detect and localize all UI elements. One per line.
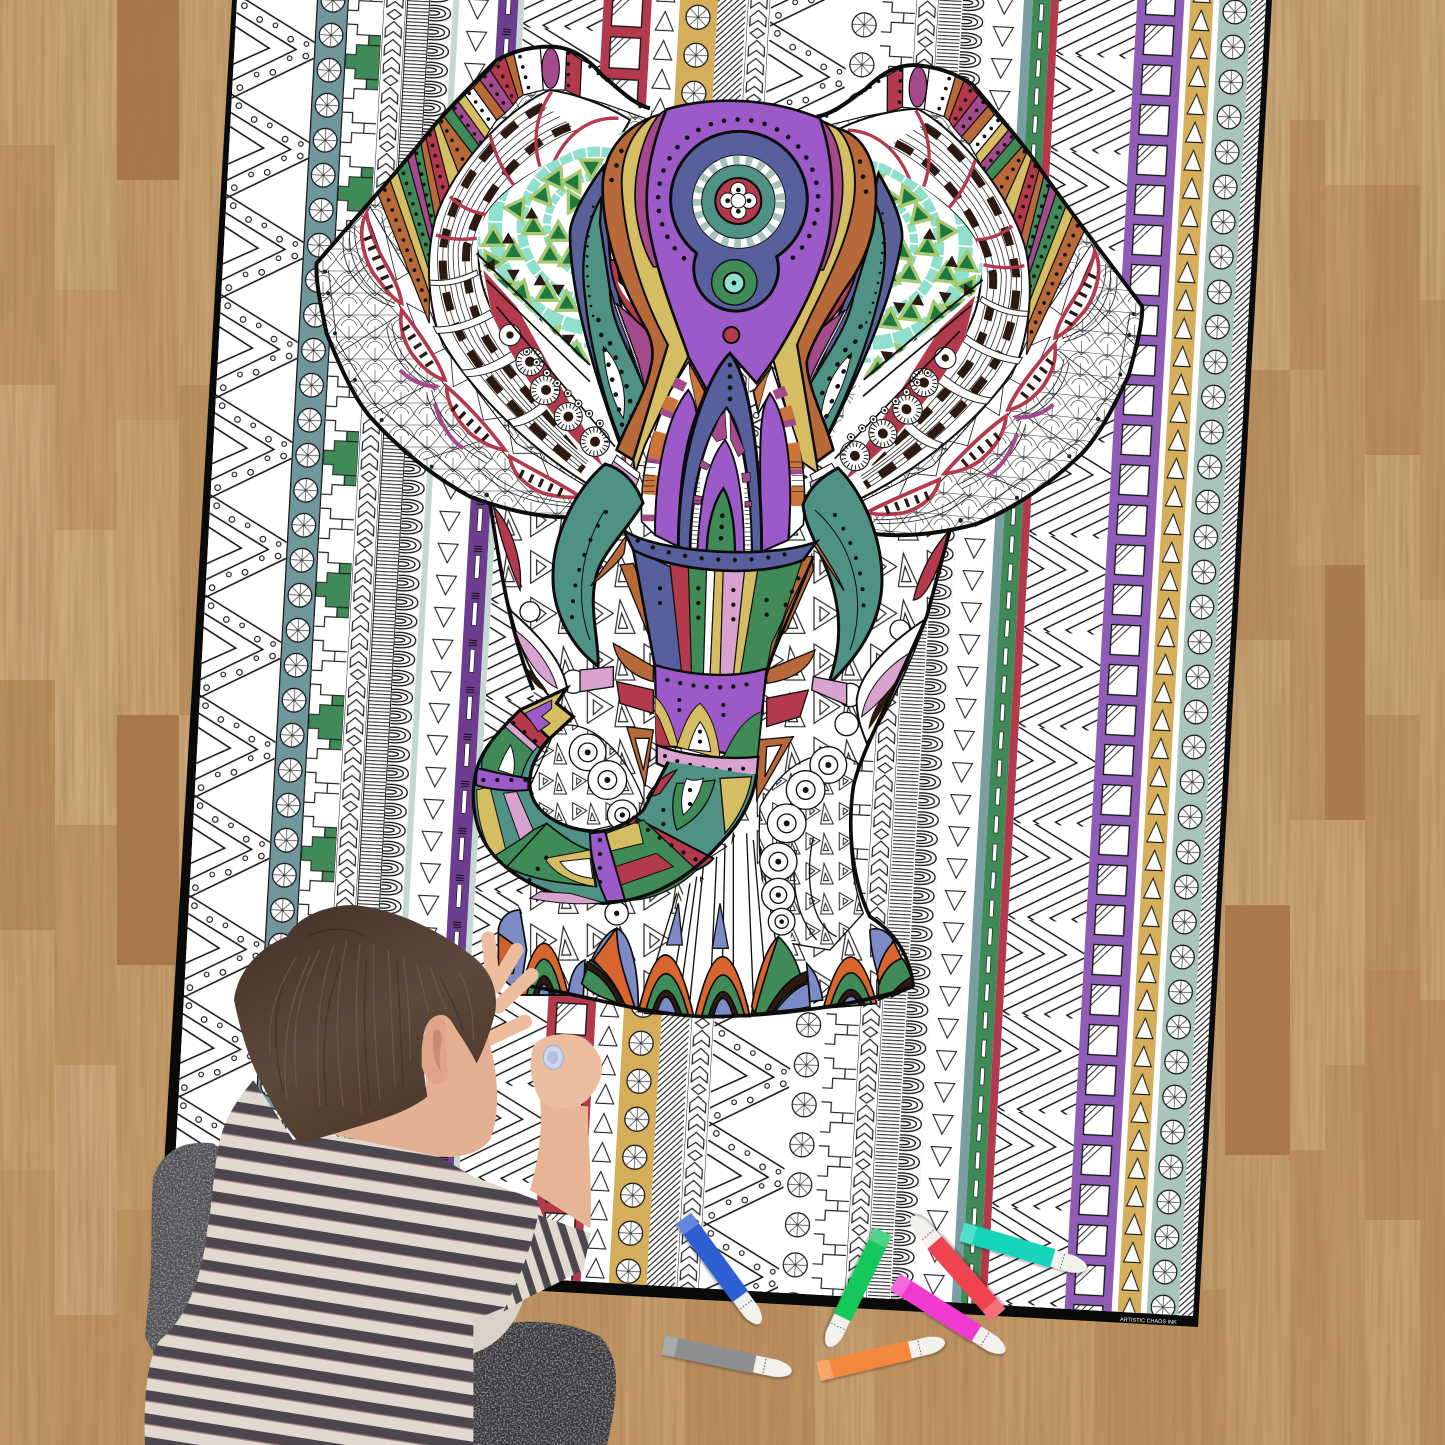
trunk purple segment [655,665,767,758]
marker: green [820,1227,892,1351]
poster: vertical tribal pattern bands [176,0,1266,1316]
purple columns [655,390,790,552]
face: right side lobes [786,173,912,447]
trunk lilac band [657,745,758,777]
boy: hand fingers reaching to poster [487,938,532,1040]
boy: forearm [530,1100,591,1228]
right striped strip [753,367,804,538]
elephant: forehead to trunk arches [610,353,838,555]
boy: ear [422,1016,448,1084]
inner striped arch [691,408,752,554]
marker: pink [890,1274,1010,1360]
boy: striped shirt [145,1080,543,1445]
trunk flanks [580,535,847,800]
elephant: face panel with concentric forehead medallion [570,101,912,473]
brand text on poster border: ARTISTIC CHAOS INK [1120,1317,1177,1326]
elephant: trunk [473,530,847,904]
face: left side lobes [570,167,655,440]
boy: left knee in grey trousers [145,1143,247,1353]
elephant: left ear [316,43,716,517]
medallion dots [658,119,818,264]
trunk collar [623,530,817,571]
right shoulder leaf [857,618,927,743]
navy arch [678,353,762,555]
elephant: tusks [553,464,882,685]
boy: right leg in dark trousers [473,1322,616,1445]
face: gold band [622,103,855,473]
poster: black border sheet [158,0,1272,1327]
boy: shirt sleeve [503,1215,591,1312]
face: brown band [603,103,876,462]
medallion rings [671,131,807,311]
marker: red [904,1210,1006,1321]
marker: teal [959,1222,1089,1278]
marker: grey [661,1336,794,1381]
markers: scattered felt pens [661,1210,1089,1381]
red bindi dot [723,327,739,343]
face: purple centre [647,101,832,390]
left shoulder leaf [510,610,567,697]
boy [145,905,616,1445]
marker: orange [816,1332,947,1381]
boy: hair [234,905,496,1143]
trunk colour stripes [633,550,813,677]
elephant: right ear [730,45,1153,560]
trunk lower coil [473,688,757,904]
left striped strip [641,362,705,535]
elephant: feet with arches [498,910,913,1017]
boy: neck and face [327,1000,497,1157]
face: magenta band [635,110,843,270]
boy: undershirt patch [473,1300,523,1353]
elephant: body and legs [490,500,950,1017]
green centre leaf [707,488,735,554]
boy: drawing hand with marker [531,1034,602,1108]
marker: blue [676,1213,768,1329]
